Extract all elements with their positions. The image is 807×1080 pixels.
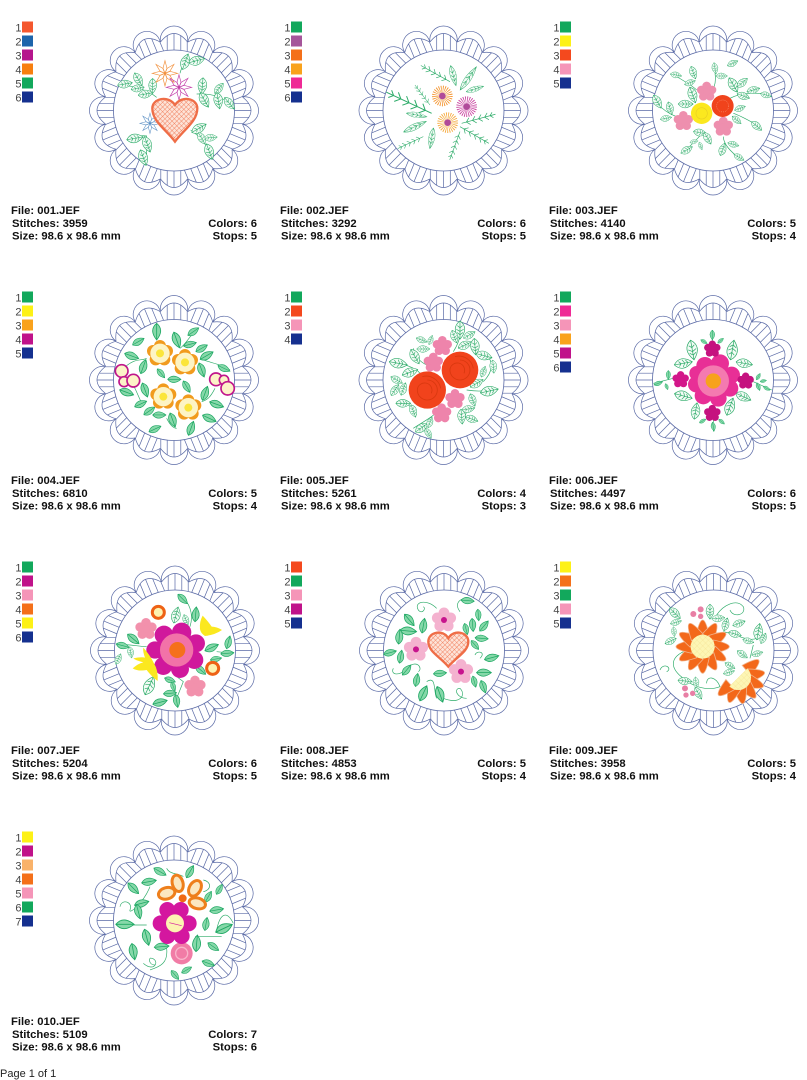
colour legend 003: 4 [553, 64, 560, 76]
panel: design 005 [280, 292, 528, 512]
colour legend 001: 5 [15, 78, 22, 90]
file info 007: Size: 98.6 x 98.6 mm [12, 770, 121, 782]
colour legend 009: 1 [553, 562, 560, 574]
file info 010: Stops: 6 [213, 1042, 257, 1054]
file info 006 [549, 475, 796, 512]
motif: magenta flower, orange flower and pink rose [116, 864, 234, 981]
file info 001: Stops: 5 [213, 230, 257, 242]
colour legend 007: 2 [15, 576, 22, 588]
file info 007: Colors: 6 [208, 758, 257, 770]
scalloped frame 006 [628, 295, 798, 465]
file info 001 [11, 205, 257, 242]
colour legend 005: 3 [284, 320, 290, 332]
colour legend 010: 1 [15, 832, 22, 844]
colour legend 004: 4 [15, 334, 22, 346]
colour legend 010: 3 [15, 860, 22, 872]
colour legend 010: 5 [15, 888, 22, 900]
colour legend 001: 6 [15, 92, 22, 104]
colour legend 006: 2 [553, 306, 560, 318]
file info 005 [280, 475, 527, 512]
colour legend 009 [553, 562, 571, 630]
file info 009 [549, 745, 797, 782]
colour legend 007: 3 [15, 590, 22, 602]
colour legend 003: 3 [553, 50, 560, 62]
panel: design 004 [11, 292, 259, 512]
file info 001: Size: 98.6 x 98.6 mm [12, 230, 121, 242]
scalloped frame 001 [89, 26, 259, 195]
colour legend 009: 3 [553, 590, 560, 602]
file info 005: Stops: 3 [482, 500, 526, 512]
panel: design 001 [11, 22, 259, 242]
colour legend 002: 6 [284, 92, 290, 104]
colour legend 001: 3 [15, 50, 22, 62]
file info 010: Stitches: 5109 [12, 1029, 88, 1041]
scalloped frame 009 [629, 566, 798, 735]
colour legend 009: 5 [553, 618, 560, 630]
file info 006: File: 006.JEF [549, 475, 618, 487]
file info 008: File: 008.JEF [280, 745, 349, 757]
scalloped frame 007 [90, 566, 260, 735]
colour legend 008: 5 [284, 618, 290, 630]
colour legend 008: 1 [284, 562, 290, 574]
file info 002: Colors: 6 [477, 218, 526, 230]
colour legend 006: 5 [553, 348, 560, 360]
colour legend 002: 5 [284, 78, 290, 90]
file info 007: Stops: 5 [213, 770, 257, 782]
file info 003: Stitches: 4140 [550, 218, 626, 230]
file info 003: File: 003.JEF [549, 205, 618, 217]
colour legend 008: 3 [284, 590, 290, 602]
colour legend 007: 4 [15, 604, 22, 616]
colour legend 008 [284, 562, 302, 630]
file info 008: Stitches: 4853 [281, 758, 357, 770]
scalloped frame 004 [89, 295, 259, 465]
file info 009: Stitches: 3958 [550, 758, 626, 770]
file info 004: File: 004.JEF [11, 475, 80, 487]
file info 002: File: 002.JEF [280, 205, 349, 217]
colour legend 010: 4 [15, 874, 22, 886]
colour legend 008: 4 [284, 604, 290, 616]
colour legend 007 [15, 562, 33, 644]
file info 010: Size: 98.6 x 98.6 mm [12, 1042, 121, 1054]
file info 005: Colors: 4 [477, 488, 527, 500]
colour legend 002: 2 [284, 36, 290, 48]
colour legend 010: 7 [15, 916, 22, 928]
file info 004: Stops: 4 [213, 500, 258, 512]
file info 008 [280, 745, 527, 782]
colour legend 006 [553, 292, 571, 374]
colour legend 002: 1 [284, 22, 290, 34]
scalloped frame 002 [359, 26, 528, 195]
scalloped frame 005 [359, 295, 528, 465]
colour legend 005: 4 [284, 334, 290, 346]
colour legend 007: 6 [15, 632, 22, 644]
colour legend 006: 3 [553, 320, 560, 332]
file info 005: Stitches: 5261 [281, 488, 357, 500]
file info 003: Size: 98.6 x 98.6 mm [550, 230, 659, 242]
file info 005: Size: 98.6 x 98.6 mm [281, 500, 390, 512]
file info 001: Colors: 6 [208, 218, 257, 230]
colour legend 009: 4 [553, 604, 560, 616]
panel: design 010 [11, 832, 259, 1054]
file info 009: Colors: 5 [747, 758, 796, 770]
panel: design 008 [280, 562, 529, 782]
file info 008: Colors: 5 [477, 758, 526, 770]
file info 004 [11, 475, 258, 512]
file info 001: File: 001.JEF [11, 205, 80, 217]
file info 001: Stitches: 3959 [12, 218, 88, 230]
colour legend 006: 4 [553, 334, 560, 346]
file info 003 [549, 205, 797, 242]
file info 010: Colors: 7 [208, 1029, 257, 1041]
colour legend 004: 2 [15, 306, 22, 318]
file info 009: Size: 98.6 x 98.6 mm [550, 770, 659, 782]
colour legend 005 [284, 292, 302, 346]
motif: roses and pink flowers [650, 58, 772, 163]
motif: orange sunflowers with berries [660, 603, 769, 705]
colour legend 003: 1 [553, 22, 560, 34]
file info 009: File: 009.JEF [549, 745, 618, 757]
colour legend 002: 4 [284, 64, 290, 76]
file info 006: Stops: 5 [752, 500, 796, 512]
motif: two red roses with pink flowers [388, 321, 499, 440]
file info 004: Stitches: 6810 [12, 488, 88, 500]
scalloped frame 008 [359, 566, 529, 735]
file info 007: File: 007.JEF [11, 745, 80, 757]
panel: design 003 [549, 22, 798, 242]
file info 006: Colors: 6 [747, 488, 796, 500]
file info 002: Stitches: 3292 [281, 218, 357, 230]
file info 003: Stops: 4 [752, 230, 797, 242]
file info 004: Colors: 5 [208, 488, 257, 500]
colour legend 002: 3 [284, 50, 290, 62]
motif: magenta flower with four small blossoms [653, 330, 772, 432]
file info 008: Size: 98.6 x 98.6 mm [281, 770, 390, 782]
scalloped frame 003 [628, 26, 798, 195]
colour legend 010 [15, 832, 33, 928]
panel: design 002 [280, 22, 528, 242]
colour legend 010: 2 [15, 846, 22, 858]
page footer: Page 1 of 1 [0, 1068, 56, 1080]
colour legend 003: 5 [553, 78, 560, 90]
file info 004: Size: 98.6 x 98.6 mm [12, 500, 121, 512]
colour legend 007: 1 [15, 562, 22, 574]
motif: orange flowers and magenta pansies [115, 323, 234, 437]
colour legend 008: 2 [284, 576, 290, 588]
panel: design 009 [549, 562, 798, 782]
file info 009: Stops: 4 [752, 770, 797, 782]
colour legend 006: 1 [553, 292, 560, 304]
colour legend 001: 1 [15, 22, 22, 34]
file info 003: Colors: 5 [747, 218, 796, 230]
colour legend 010: 6 [15, 902, 22, 914]
colour legend 001: 4 [15, 64, 22, 76]
file info 002: Size: 98.6 x 98.6 mm [281, 230, 390, 242]
colour legend 004: 1 [15, 292, 22, 304]
colour legend 007: 5 [15, 618, 22, 630]
colour legend 005: 1 [284, 292, 290, 304]
file info 010: File: 010.JEF [11, 1016, 80, 1028]
file info 008: Stops: 4 [482, 770, 527, 782]
panel: design 006 [549, 292, 798, 512]
colour legend 005: 2 [284, 306, 290, 318]
colour legend 004: 5 [15, 348, 22, 360]
file info 005: File: 005.JEF [280, 475, 349, 487]
motif: large magenta flower with yellow and orange buds [113, 592, 234, 708]
file info 010 [11, 1016, 257, 1054]
file info 006: Size: 98.6 x 98.6 mm [550, 500, 659, 512]
file info 002 [280, 205, 526, 242]
motif: heart with stars and sprigs [117, 52, 237, 167]
colour legend 009: 2 [553, 576, 560, 588]
colour legend 002 [284, 22, 302, 104]
colour legend 001 [15, 22, 33, 104]
colour legend 004 [15, 292, 33, 360]
file info 007: Stitches: 5204 [12, 758, 88, 770]
file info 002: Stops: 5 [482, 230, 526, 242]
panel: design 007 [11, 562, 260, 782]
file info 007 [11, 745, 257, 782]
colour legend 004: 3 [15, 320, 22, 332]
colour legend 003: 2 [553, 36, 560, 48]
colour legend 006: 6 [553, 362, 560, 374]
motif: mesh heart with pink flowers and curls [383, 597, 500, 704]
colour legend 001: 2 [15, 36, 22, 48]
scalloped frame 010 [89, 836, 259, 1005]
motif: fern spray with three flowers [384, 63, 496, 161]
file info 006: Stitches: 4497 [550, 488, 626, 500]
colour legend 003 [553, 22, 571, 90]
